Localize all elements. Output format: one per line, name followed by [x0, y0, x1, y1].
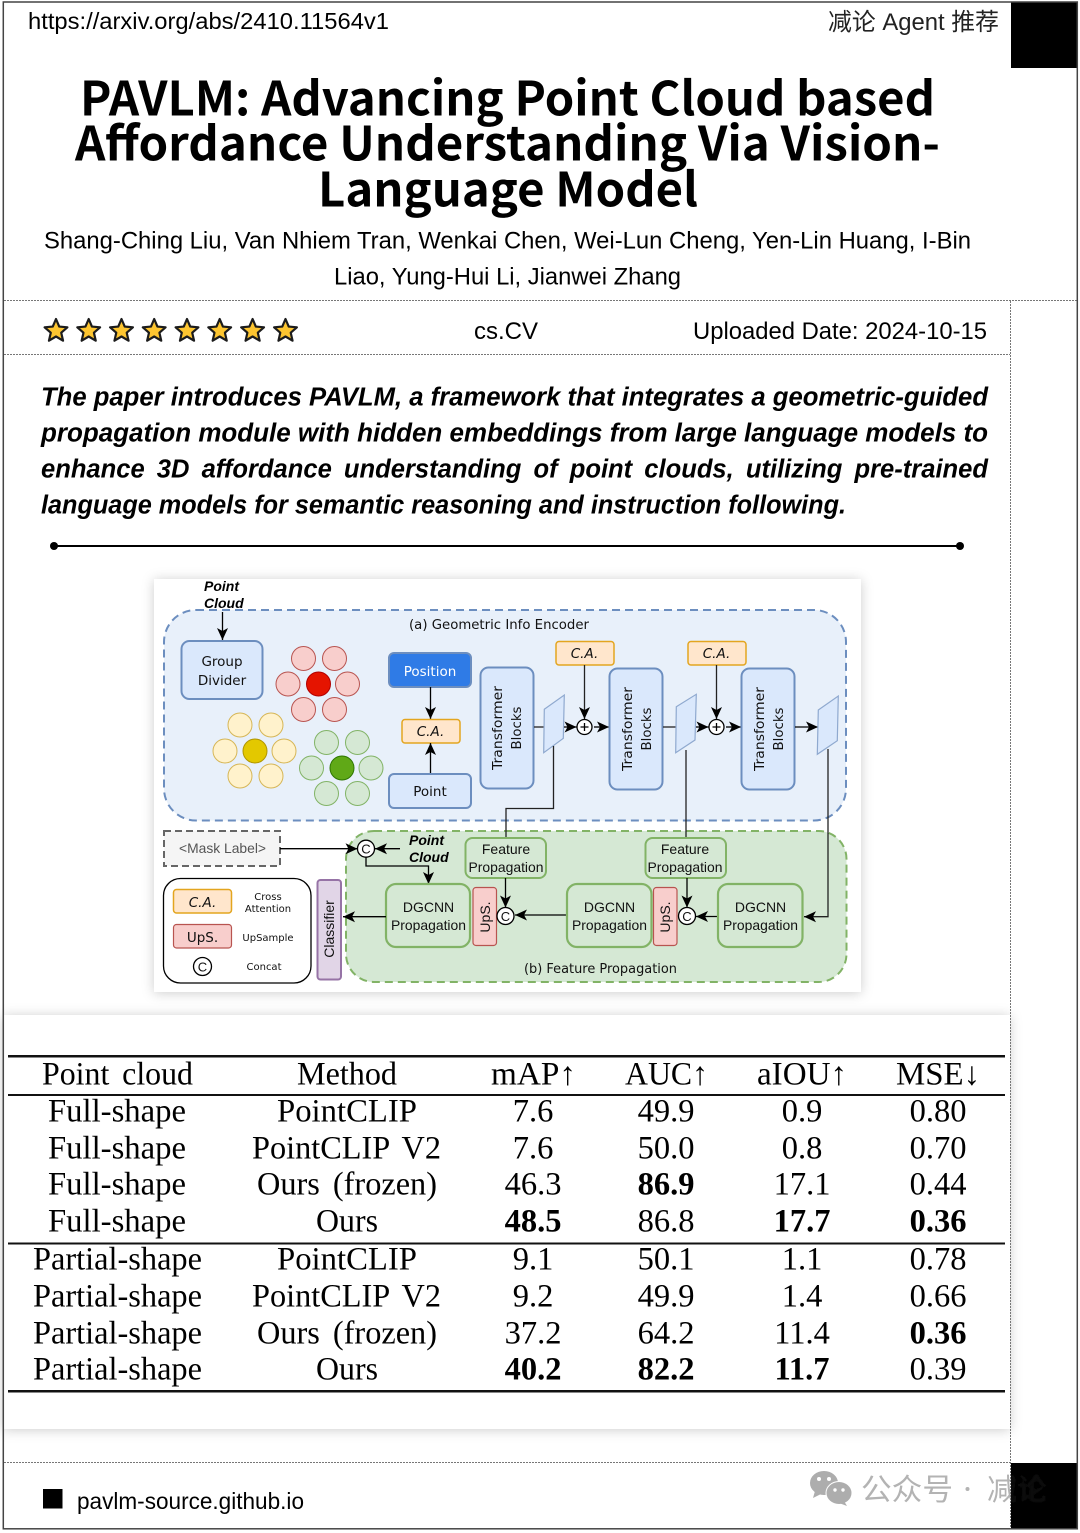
projection plane 3	[817, 696, 838, 754]
box: feature propagation 1: Feature	[482, 841, 530, 857]
abstract summary	[40, 384, 989, 520]
row: full-shape PointCLIP V2: 7.6	[513, 1131, 553, 1167]
box: classifier: Classifier	[321, 900, 337, 958]
box: transformer blocks 1: Transformer	[490, 686, 506, 771]
authors: Shang-Ching Liu, Van Nhiem Tran, Wenkai Chen, Wei-Lun Cheng, Yen-Lin Huang, I-Bin	[44, 228, 971, 254]
authors	[44, 228, 971, 290]
box: cross attention top 1: C.A.	[571, 646, 598, 662]
row: partial-shape PointCLIP: 9.1	[513, 1242, 553, 1278]
table header row: Point cloud	[42, 1057, 193, 1093]
arrow: cross attention to sum 2	[716, 665, 718, 719]
box: cross attention: C.A.	[417, 724, 444, 740]
box: transformer blocks 3: Blocks	[771, 708, 787, 750]
concat node 2: C	[501, 909, 510, 924]
row: full-shape ours: 48.5	[505, 1204, 561, 1240]
label: point cloud second input	[409, 832, 449, 865]
panel: table card background	[3, 1015, 1010, 1429]
row: partial-shape ours: Ours	[316, 1352, 378, 1388]
connector: projection 1 to feature propagation 1	[506, 746, 554, 838]
row: partial-shape PointCLIP: Partial-shape	[33, 1242, 202, 1278]
row: partial-shape ours frozen: 37.2	[505, 1316, 561, 1352]
sum node 1	[577, 720, 592, 734]
row: full-shape ours frozen	[48, 1167, 966, 1203]
arrow: projection 2 to sum	[696, 726, 708, 728]
legend: cross attention: C.A.	[189, 895, 216, 911]
corner block: bottom right	[1011, 1463, 1078, 1529]
box: transformer blocks 2: Blocks	[639, 708, 655, 750]
box: position	[389, 653, 471, 687]
results table	[8, 1055, 1005, 1392]
concat node 2	[497, 908, 514, 924]
table header row: MSE↓	[896, 1057, 980, 1093]
row: full-shape PointCLIP: 49.9	[638, 1094, 694, 1130]
row: full-shape PointCLIP: Full-shape	[48, 1094, 186, 1130]
row: partial-shape ours frozen: 11.4	[774, 1316, 830, 1352]
panel: feature propagation: (b) Feature Propagation	[524, 961, 677, 977]
legend: cross attention: Attention	[245, 904, 291, 915]
label: point cloud second input: Cloud	[409, 849, 449, 865]
arrow: point to cross attention	[430, 743, 432, 774]
label: point cloud input: Point	[204, 578, 240, 594]
row: full-shape ours	[48, 1204, 966, 1240]
row: full-shape ours: 0.36	[910, 1204, 966, 1240]
row: full-shape ours: 86.8	[638, 1204, 694, 1240]
concat node 1	[358, 840, 374, 857]
panel: feature propagation	[346, 831, 846, 982]
legend: upsample: UpS.	[187, 930, 218, 946]
row: partial-shape ours	[33, 1352, 966, 1388]
legend: cross attention	[174, 890, 291, 915]
rating stars	[45, 319, 297, 341]
row: full-shape ours frozen: Ours (frozen)	[257, 1167, 437, 1203]
row: partial-shape PointCLIP V2: Partial-shape	[33, 1279, 202, 1315]
arrow: point cloud to group divider	[222, 612, 224, 640]
arrow: dgcnn 1 to classifier	[343, 916, 386, 918]
box: dgcnn 1	[386, 884, 470, 947]
box: dgcnn 2	[567, 884, 652, 947]
box: classifier	[318, 880, 341, 980]
title: Affordance Understanding Via Vision-	[74, 106, 940, 174]
row: full-shape ours frozen: Full-shape	[48, 1167, 186, 1203]
box: point	[389, 774, 471, 808]
arrow: point cloud to concat	[375, 848, 400, 850]
title: Language Model	[318, 152, 698, 220]
row: full-shape PointCLIP V2: 0.70	[910, 1131, 966, 1167]
row: full-shape PointCLIP	[48, 1094, 966, 1130]
abstract summary: The paper introduces PAVLM, a framework that integrates a geometric-guided	[41, 384, 989, 412]
box: feature propagation 2: Propagation	[648, 859, 722, 875]
box: mask label: <Mask Label>	[179, 840, 266, 856]
architecture diagram	[164, 578, 846, 983]
row: full-shape ours: 17.7	[774, 1204, 830, 1240]
legend	[164, 878, 311, 983]
table header row	[42, 1057, 980, 1093]
row: partial-shape ours: Partial-shape	[33, 1352, 202, 1388]
connector: block 2 to projection	[663, 726, 676, 728]
row: partial-shape ours frozen: 0.36	[910, 1316, 966, 1352]
arrow: cross attention to sum 1	[584, 665, 586, 719]
row: partial-shape PointCLIP: 1.1	[782, 1242, 822, 1278]
table header row: mAP↑	[491, 1057, 576, 1093]
concat node 1: C	[361, 842, 371, 856]
box: feature propagation 2	[646, 838, 726, 878]
header: source url: https://arxiv.org/abs/2410.11564v1	[28, 8, 389, 34]
box: cross attention top 2: C.A.	[703, 646, 730, 662]
row: partial-shape ours frozen	[33, 1316, 966, 1352]
row: partial-shape ours: 0.39	[910, 1352, 966, 1388]
header: recommendation tag: 减论 Agent 推荐	[828, 9, 999, 36]
arrow: sum 1 to block 2	[594, 726, 609, 728]
arrow: feature propagation 2 to concat	[686, 878, 688, 908]
table header row: Method	[297, 1057, 397, 1093]
footer: bullet square	[43, 1489, 62, 1508]
box: group divider: Group	[201, 654, 243, 670]
box: upsample 2: UpS.	[657, 901, 673, 933]
box: position: Position	[404, 664, 456, 680]
row: partial-shape PointCLIP V2: 49.9	[638, 1279, 694, 1315]
point group: red	[276, 646, 360, 722]
row: partial-shape PointCLIP V2: 9.2	[513, 1279, 553, 1315]
row: full-shape ours: Ours	[316, 1204, 378, 1240]
arrow: dgcnn 3 to concat 3	[696, 916, 718, 918]
row: full-shape PointCLIP: PointCLIP	[277, 1094, 417, 1130]
box: dgcnn 3: DGCNN	[735, 899, 786, 915]
arrow: mask label to concat	[280, 848, 358, 850]
table rules	[8, 1055, 1005, 1392]
box: transformer blocks 2: Transformer	[620, 687, 636, 772]
legend: upsample	[174, 924, 294, 948]
arrow: sum 2 to block 3	[726, 726, 741, 728]
point group: yellow	[213, 713, 296, 788]
row: full-shape PointCLIP V2	[48, 1131, 966, 1167]
row: partial-shape PointCLIP V2	[33, 1279, 966, 1315]
projection plane 2	[676, 694, 696, 753]
row: full-shape PointCLIP: 7.6	[513, 1094, 553, 1130]
box: feature propagation 1: Propagation	[468, 859, 544, 875]
label: point cloud input: Cloud	[204, 595, 244, 611]
row: partial-shape ours: 82.2	[638, 1352, 694, 1388]
abstract summary: enhance 3D affordance understanding of point clouds, utilizing pre-trained	[41, 456, 989, 484]
row: partial-shape ours frozen: Partial-shape	[33, 1316, 202, 1352]
arrow: feature propagation 1 to concat	[504, 878, 506, 908]
concat node 3: C	[682, 909, 692, 924]
authors: Liao, Yung-Hui Li, Jianwei Zhang	[334, 264, 681, 290]
row: partial-shape PointCLIP: PointCLIP	[277, 1242, 417, 1278]
row: partial-shape ours frozen: 64.2	[638, 1316, 694, 1352]
row: full-shape ours frozen: 0.44	[910, 1167, 966, 1203]
box: mask label	[164, 831, 280, 866]
row: full-shape ours: Full-shape	[48, 1204, 186, 1240]
row: full-shape PointCLIP V2: 50.0	[638, 1131, 694, 1167]
box: point: Point	[413, 784, 447, 800]
projection plane 1	[544, 695, 564, 753]
box: transformer blocks 3	[742, 668, 794, 790]
box: cross attention	[402, 720, 460, 743]
box: feature propagation 1	[466, 838, 546, 878]
corner block: top right	[1011, 2, 1078, 68]
abstract summary: propagation module with hidden embeddings from large language models to	[40, 420, 988, 448]
arrow: concat to dgcnn 1	[366, 857, 428, 884]
box: transformer blocks 2	[610, 668, 662, 790]
sum node 2	[709, 720, 724, 734]
box: transformer blocks 3: Transformer	[752, 687, 768, 772]
label: point cloud second input: Point	[409, 832, 445, 848]
box: dgcnn 2: Propagation	[572, 917, 647, 933]
watermark	[810, 1471, 1046, 1506]
watermark text: 减论	[987, 1465, 1047, 1509]
category: cs.CV	[474, 318, 538, 345]
divider with end dots	[50, 542, 964, 550]
box: group divider: Divider	[198, 673, 247, 689]
box: upsample 2	[654, 888, 677, 946]
box: feature propagation 2: Feature	[661, 841, 709, 857]
box: group divider	[182, 641, 262, 699]
title: PAVLM: Advancing Point Cloud based	[80, 60, 935, 130]
row: full-shape PointCLIP V2: 0.8	[782, 1131, 822, 1167]
row: partial-shape ours: 11.7	[774, 1352, 830, 1388]
watermark text: 公众号	[861, 1465, 953, 1509]
arrow: position to cross attention	[430, 687, 432, 719]
box: cross attention top 1	[556, 642, 614, 665]
box: cross attention top 2	[688, 642, 746, 665]
box: dgcnn 3	[718, 884, 802, 947]
watermark text: 减论	[987, 1465, 1047, 1509]
box: dgcnn 2: DGCNN	[584, 899, 635, 915]
title	[74, 60, 940, 220]
concat node 3	[678, 908, 696, 924]
box: transformer blocks 1	[480, 668, 534, 788]
row: full-shape PointCLIP V2: PointCLIP V2	[252, 1131, 441, 1167]
icon: wechat	[810, 1471, 852, 1506]
panel: diagram card background	[154, 579, 861, 992]
box: upsample 1: UpS.	[477, 901, 493, 933]
row: full-shape ours frozen: 17.1	[774, 1167, 830, 1203]
connector: block 1 to projection	[534, 726, 544, 728]
row: partial-shape PointCLIP	[33, 1242, 966, 1278]
legend: concat: Concat	[246, 962, 282, 973]
watermark text: 减	[987, 1465, 1017, 1509]
connector: projection 2 to feature propagation 2	[685, 750, 687, 838]
row: full-shape PointCLIP: 0.80	[910, 1094, 966, 1130]
row: partial-shape ours: 40.2	[505, 1352, 561, 1388]
box: upsample 1	[473, 888, 496, 946]
label: point cloud input	[204, 578, 244, 611]
legend: concat	[194, 958, 282, 976]
row: partial-shape PointCLIP: 50.1	[638, 1242, 694, 1278]
upload date: Uploaded Date: 2024-10-15	[693, 318, 987, 345]
arrow: block 3 to projection	[795, 726, 818, 728]
row: partial-shape ours frozen: Ours (frozen)	[257, 1316, 437, 1352]
box: dgcnn 1: Propagation	[391, 917, 466, 933]
row: partial-shape PointCLIP V2: 1.4	[782, 1279, 822, 1315]
legend: cross attention: Cross	[254, 892, 282, 903]
box: dgcnn 1: DGCNN	[403, 899, 454, 915]
arrow: dgcnn 2 to concat 2	[515, 914, 567, 916]
arrow: projection 1 to sum	[564, 726, 576, 728]
point group: green	[300, 730, 383, 806]
row: full-shape PointCLIP V2: Full-shape	[48, 1131, 186, 1167]
box: transformer blocks 1: Blocks	[509, 706, 525, 750]
panel: geometric info encoder	[164, 610, 846, 820]
table header row: AUC↑	[625, 1057, 708, 1093]
legend: concat: C	[198, 960, 207, 974]
arrow: projection 3 to dgcnn 3	[804, 749, 828, 917]
legend: upsample: UpSample	[242, 933, 294, 944]
watermark text	[862, 1474, 1046, 1502]
abstract summary: language models for semantic reasoning and instruction following.	[41, 492, 846, 520]
row: full-shape ours frozen: 46.3	[505, 1167, 561, 1203]
row: partial-shape PointCLIP V2: 0.66	[910, 1279, 966, 1315]
footer: project link: pavlm-source.github.io	[77, 1488, 304, 1514]
panel: geometric info encoder: (a) Geometric Info Encoder	[409, 617, 589, 633]
dotted separators	[4, 300, 1077, 1528]
box: dgcnn 3: Propagation	[723, 917, 798, 933]
row: full-shape PointCLIP: 0.9	[782, 1094, 822, 1130]
row: partial-shape PointCLIP V2: PointCLIP V2	[252, 1279, 441, 1315]
row: full-shape ours frozen: 86.9	[638, 1167, 694, 1203]
table header row: aIOU↑	[757, 1057, 847, 1093]
row: partial-shape PointCLIP: 0.78	[910, 1242, 966, 1278]
